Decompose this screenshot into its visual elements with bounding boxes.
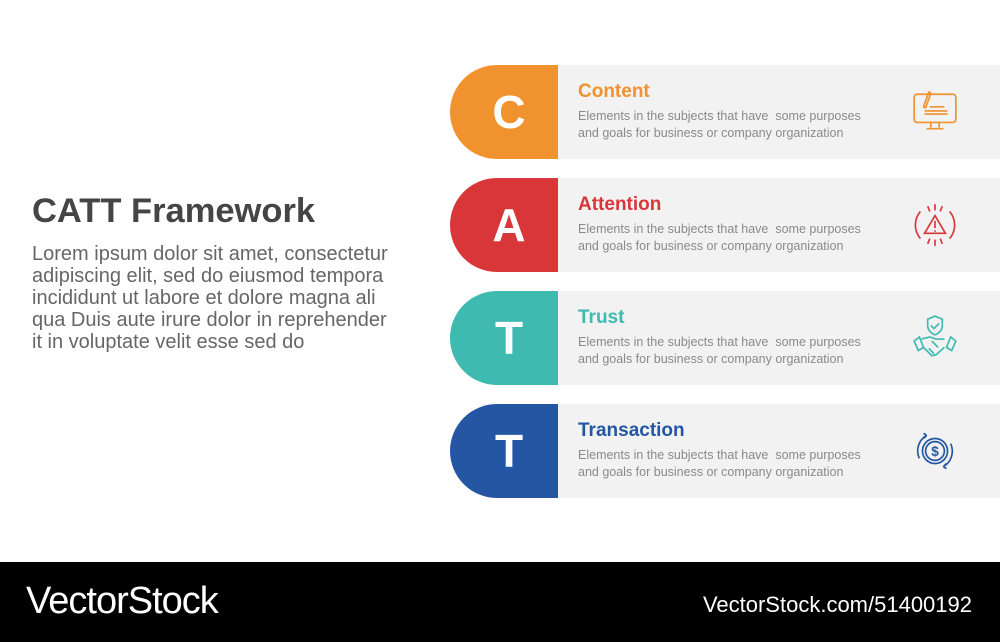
title: CATT Framework [32, 192, 315, 230]
heading: content: Content [578, 81, 650, 102]
heading: transaction: Transaction [578, 420, 685, 441]
description: content: Elements in the subjects that have some purposes and goals for business or company organization [578, 109, 861, 140]
footer id: VectorStock.com/51400192 [703, 592, 972, 617]
icon: coin cycle: $ [931, 444, 939, 459]
footer logo: VectorStock [26, 580, 218, 622]
pill: A: A [492, 199, 526, 251]
row: content [450, 65, 1000, 159]
pill: T: T [495, 425, 523, 477]
pill: C [450, 65, 558, 159]
footer [0, 562, 1000, 642]
heading: trust: Trust [578, 307, 624, 328]
description: attention: Elements in the subjects that have some purposes and goals for business or company organization [578, 222, 861, 253]
icon: coin cycle [916, 432, 954, 470]
row: trust [450, 291, 1000, 385]
pill: T [450, 291, 558, 385]
intro text: Lorem ipsum dolor sit amet, consectetur adipiscing elit, sed do eiusmod tempora incididunt ut labore et dolore magna ali qua Duis aute irure dolor in reprehender it in voluptate velit esse sed do [32, 243, 388, 353]
row: attention [450, 178, 1000, 272]
description: transaction: Elements in the subjects that have some purposes and goals for business or company organization [578, 448, 861, 479]
icon: handshake with shield [913, 315, 957, 357]
heading: attention: Attention [578, 194, 661, 215]
icon: alert [914, 204, 956, 246]
pill: T [450, 404, 558, 498]
pill: C: C [492, 86, 526, 138]
description: trust: Elements in the subjects that have some purposes and goals for business or company organization [578, 335, 861, 366]
row: transaction [450, 404, 1000, 498]
pill: T: T [495, 312, 523, 364]
icon: monitor with pen [913, 91, 957, 130]
pill: A [450, 178, 558, 272]
